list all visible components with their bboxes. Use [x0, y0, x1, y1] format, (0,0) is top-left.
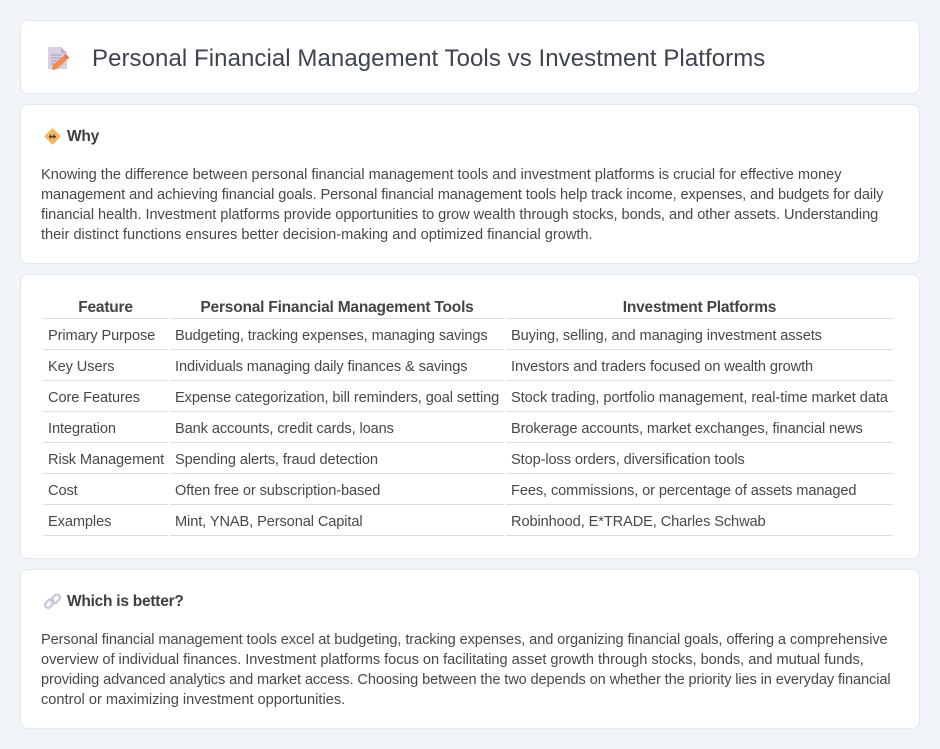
row: key users: Key Users	[48, 359, 114, 375]
table header: Personal Financial Management Tools	[200, 299, 474, 316]
row: core features: Expense categorization, bill reminders, goal setting	[175, 390, 499, 406]
row: core features: Core Features	[48, 390, 140, 406]
icon: memo with pencil	[48, 47, 69, 70]
row: core features	[48, 390, 888, 406]
row: cost: Cost	[48, 483, 78, 499]
heading: why: Why	[67, 128, 99, 145]
text block: which is better: Personal financial management tools excel at budgeting, tracking expenses, and organizing financial goals, offering a comprehensive	[41, 632, 888, 648]
table header: Feature	[78, 299, 133, 316]
row: primary purpose: Buying, selling, and managing investment assets	[511, 328, 822, 344]
text block: why: Knowing the difference between personal financial management tools and investment platforms is crucial for effective money	[41, 167, 842, 183]
text block: why	[41, 167, 884, 243]
title text: Personal Financial Management Tools vs Investment Platforms	[92, 45, 765, 72]
row: cost: Often free or subscription-based	[175, 483, 380, 499]
text block: why: financial health. Investment platforms provide opportunities to grow wealth through stocks, bonds, and other assets. Understanding	[41, 207, 878, 223]
row: examples: Mint, YNAB, Personal Capital	[175, 514, 363, 530]
row: key users: Individuals managing daily finances & savings	[175, 359, 467, 375]
row: primary purpose: Budgeting, tracking expenses, managing savings	[175, 328, 488, 344]
row: examples	[48, 514, 766, 530]
row: key users	[48, 359, 813, 375]
row: risk management: Risk Management	[48, 452, 164, 468]
row: integration: Brokerage accounts, market exchanges, financial news	[511, 421, 863, 437]
row: primary purpose: Primary Purpose	[48, 328, 155, 344]
row: integration: Bank accounts, credit cards, loans	[175, 421, 394, 437]
icon: warning diamond	[44, 128, 60, 144]
row: examples: Examples	[48, 514, 111, 530]
panel: why	[20, 104, 920, 264]
row: risk management: Stop-loss orders, diversification tools	[511, 452, 745, 468]
row: integration	[48, 421, 863, 437]
panel: title	[20, 20, 920, 94]
row: cost: Fees, commissions, or percentage of assets managed	[511, 483, 856, 499]
text block: which is better	[41, 632, 890, 708]
row: risk management: Spending alerts, fraud detection	[175, 452, 378, 468]
icon: chain link	[44, 594, 61, 609]
text block: why: management and achieving financial goals. Personal financial management tools help track income, expenses, and budgets for daily	[41, 187, 883, 203]
row: examples: Robinhood, E*TRADE, Charles Schwab	[511, 514, 766, 530]
row: core features: Stock trading, portfolio management, real-time market data	[511, 390, 888, 406]
row: primary purpose	[48, 328, 822, 344]
text block: which is better: providing advanced analytics and market access. Choosing between the two depends on whether the priority lies in everyday financial	[41, 672, 890, 688]
row: integration: Integration	[48, 421, 116, 437]
row: risk management	[48, 452, 745, 468]
panel: which is better	[20, 569, 920, 729]
table header	[78, 299, 776, 316]
text block: why: their distinct functions ensures better decision-making and optimized financial growth.	[41, 227, 593, 243]
row: cost	[48, 483, 856, 499]
heading: which is better: Which is better?	[67, 593, 184, 610]
table header: Investment Platforms	[623, 299, 776, 316]
row: key users: Investors and traders focused on wealth growth	[511, 359, 813, 375]
text block: which is better: overview of individual finances. Investment platforms focus on facilitating asset growth through stocks, bonds, and mutual funds,	[41, 652, 864, 668]
text block: which is better: control or maximizing investment opportunities.	[41, 692, 345, 708]
panel: comparison table	[20, 274, 920, 559]
